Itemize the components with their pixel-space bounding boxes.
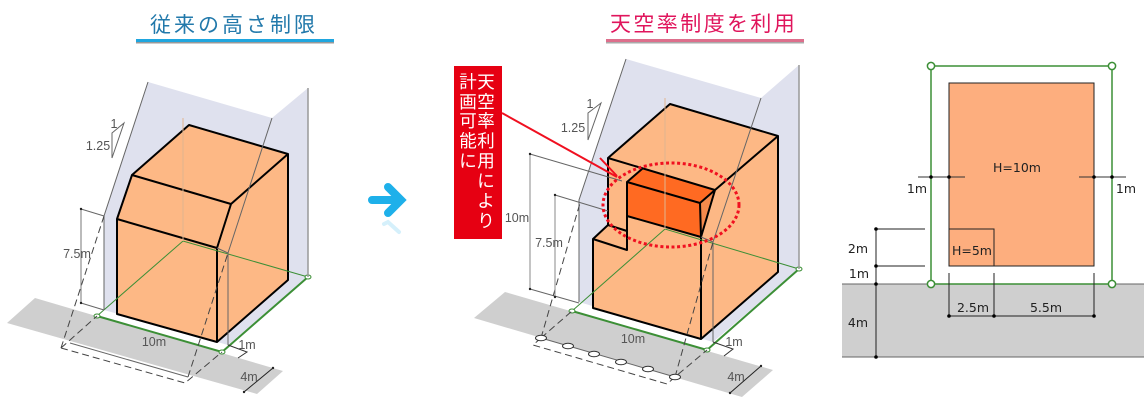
slope ratio 1 : 1.25 (561, 97, 601, 140)
slope and projection lines (61, 82, 308, 383)
heading: conventional height limit: 従来の高さ制限 (150, 14, 318, 37)
dimension: depth 2m 1m 4m (848, 227, 925, 359)
lower footprint H=5m: H=5m (952, 243, 992, 258)
site boundary (94, 241, 311, 354)
panel: plan view (842, 62, 1144, 359)
dimension: 4m (240, 367, 274, 393)
sky exposure planes (579, 59, 799, 342)
road (474, 292, 773, 397)
slope ratio 1 : 1.25: 1 (111, 117, 118, 131)
dimension: 4m (727, 365, 762, 394)
dotted highlight ellipse (603, 163, 739, 247)
callout box (454, 66, 502, 239)
sky exposure planes (104, 82, 308, 345)
dimension: width 2.5m 5.5m (947, 273, 1096, 318)
heading: using sky exposure system: 天空率制度を利用 (610, 13, 797, 36)
dimension: width 2.5m 5.5m: 5.5m (1030, 300, 1062, 315)
dimension: 1m: 1m (238, 338, 256, 352)
callout arrow (502, 113, 617, 177)
dimension: depth 2m 1m 4m: 4m (848, 315, 868, 330)
dimension: 7.5m height: 7.5m (535, 236, 563, 250)
building volume (593, 104, 778, 339)
site boundary (569, 229, 802, 352)
dimension: 10m: 10m (142, 335, 166, 349)
dimension: 1m (713, 335, 743, 356)
dimension: 10m width: 10m (621, 332, 645, 346)
dimension: side setback 1m: 1m (1116, 181, 1136, 196)
callout box: 天空率利用により (477, 72, 495, 231)
dimension: 10m height: 10m (505, 211, 529, 225)
view points (536, 335, 680, 380)
heading: conventional height limit (136, 14, 334, 44)
lower footprint H=5m (949, 229, 994, 266)
road (842, 284, 1144, 357)
dimension: width 2.5m 5.5m: 2.5m (957, 300, 989, 315)
slope ratio 1 : 1.25 (86, 117, 124, 158)
arrow (372, 187, 401, 232)
dimension: 7.5m (63, 208, 91, 304)
slope and projection lines (530, 59, 799, 384)
slope ratio 1 : 1.25: 1.25 (86, 139, 110, 153)
slope ratio 1 : 1.25: 1.25 (561, 121, 585, 135)
dimension: 10m height (505, 153, 531, 290)
dimension: 4m: 4m (727, 370, 745, 384)
dimension: side setback 1m (907, 175, 1136, 196)
slope ratio 1 : 1.25: 1 (587, 97, 594, 111)
dimension: 4m: 4m (240, 370, 258, 384)
dimension: 7.5m: 7.5m (63, 247, 91, 261)
dimension: 7.5m height (535, 194, 563, 298)
callout box: 計画可能に (459, 72, 477, 171)
building volume (117, 125, 288, 342)
dimension: side setback 1m: 1m (907, 181, 927, 196)
road (7, 298, 283, 394)
panel: using sky exposure system (454, 13, 804, 397)
panel: conventional height limit (7, 14, 334, 394)
dimension: depth 2m 1m 4m: 2m (848, 241, 868, 256)
dimension: 1m (228, 338, 256, 358)
building footprint H=10m: H=10m (993, 160, 1041, 175)
site boundary (927, 62, 1116, 288)
building footprint H=10m (949, 83, 1094, 266)
dimension: 1m: 1m (725, 335, 743, 349)
dimension: depth 2m 1m 4m: 1m (849, 266, 869, 281)
extra volume enabled by sky exposure (627, 169, 715, 237)
